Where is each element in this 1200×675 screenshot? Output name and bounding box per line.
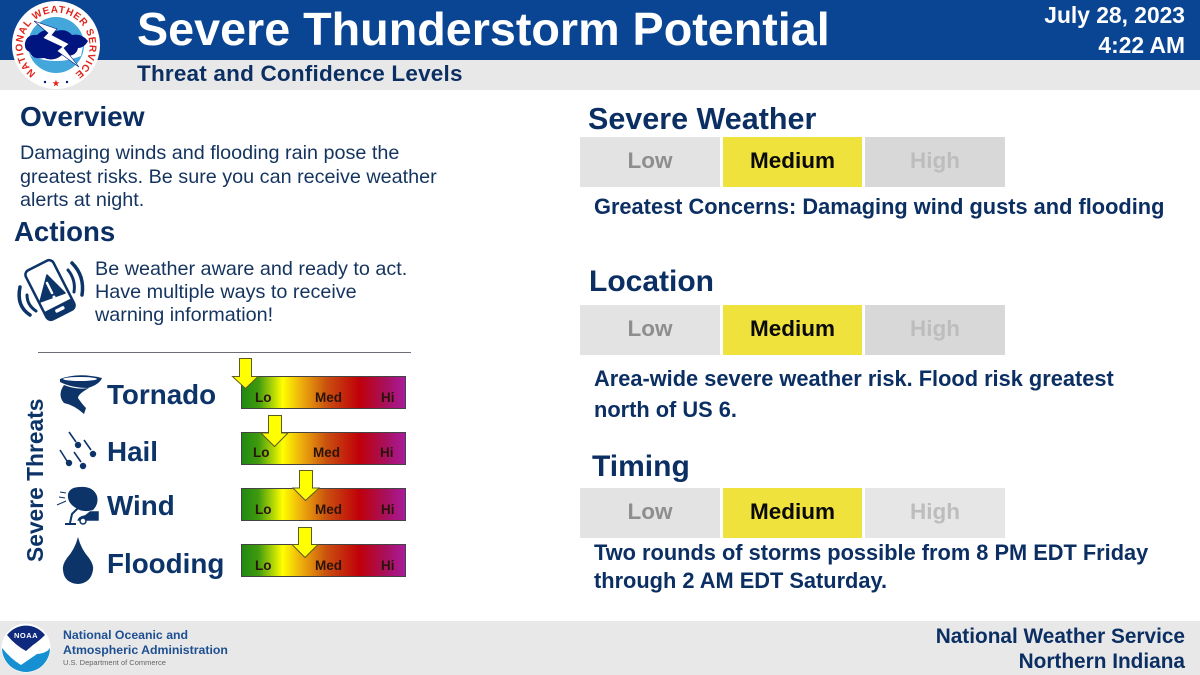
location scale [580, 305, 1005, 355]
severe weather text: Greatest Concerns: Damaging wind gusts and flooding [594, 194, 1164, 219]
icon: phone alert [17, 258, 84, 322]
location scale: High [910, 316, 960, 341]
location scale: Low [628, 316, 672, 341]
timing text [594, 540, 1148, 593]
hail gauge: Hi [380, 445, 394, 460]
wind label: Wind [107, 490, 175, 521]
location scale: Medium [750, 316, 835, 341]
date and time [1044, 2, 1185, 58]
severe weather heading: Severe Weather [588, 102, 816, 136]
date and time: July 28, 2023 [1044, 2, 1185, 28]
arrow: flooding level [291, 527, 319, 558]
icon: NWS logo: NATIONAL WEATHER SERVICE [16, 6, 97, 79]
NOAA name: National Oceanic and [63, 628, 188, 642]
subtitle: Threat and Confidence Levels [137, 61, 463, 86]
flooding label: Flooding [107, 548, 224, 579]
flooding gauge: Hi [381, 558, 394, 573]
actions text: Have multiple ways to receive [95, 281, 357, 303]
office name: Northern Indiana [1019, 650, 1185, 673]
tornado label: Tornado [107, 379, 216, 410]
flooding gauge: Lo [255, 558, 272, 573]
overview text: greatest risks. Be sure you can receive weather [20, 166, 437, 188]
overview text: alerts at night. [20, 189, 144, 211]
icon: NOAA logo: NOAA [14, 631, 38, 640]
timing text: Two rounds of storms possible from 8 PM EDT Friday [594, 540, 1148, 565]
flooding gauge [241, 544, 406, 577]
subheader band [0, 60, 1200, 90]
wind gauge: Med [315, 502, 342, 517]
timing heading: Timing [592, 450, 690, 483]
tornado gauge: Hi [381, 390, 394, 405]
date and time: 4:22 AM [1098, 32, 1185, 58]
icon: NOAA logo [2, 624, 50, 672]
flooding gauge: Med [315, 558, 342, 573]
tornado gauge: Med [315, 390, 342, 405]
wind gauge: Hi [381, 502, 394, 517]
actions heading: Actions [14, 216, 115, 247]
severe weather scale [580, 137, 1005, 187]
timing scale [580, 488, 1005, 538]
timing scale: Medium [750, 499, 835, 524]
wind gauge [241, 488, 406, 521]
icon: NWS logo: ★ [52, 79, 60, 88]
timing scale: Low [628, 499, 672, 524]
severe weather scale: Medium [750, 148, 835, 173]
header band [0, 0, 1200, 60]
office name [936, 625, 1186, 673]
title: Severe Thunderstorm Potential [137, 3, 830, 55]
NOAA name: Atmospheric Administration [63, 642, 228, 656]
location heading: Location [589, 265, 714, 298]
icon: wind damage [56, 486, 99, 525]
location text: Area-wide severe weather risk. Flood risk greatest [594, 366, 1114, 391]
severe weather scale: Low [628, 148, 672, 173]
hail gauge: Med [313, 445, 340, 460]
arrow: tornado level [231, 358, 259, 389]
actions text [95, 258, 407, 326]
footer band [0, 621, 1200, 675]
tornado gauge: Lo [255, 390, 272, 405]
department line: U.S. Department of Commerce [63, 658, 166, 667]
icon: hail [59, 432, 96, 470]
hail gauge: Lo [253, 445, 270, 460]
location text [594, 366, 1114, 422]
arrow: hail level [260, 415, 289, 448]
overview text: Damaging winds and flooding rain pose the [20, 142, 399, 164]
location text: north of US 6. [594, 397, 737, 422]
icon: tornado [60, 375, 102, 414]
actions text: warning information! [95, 304, 273, 326]
severe weather scale: High [910, 148, 960, 173]
hail label: Hail [107, 436, 158, 467]
tornado gauge [241, 376, 406, 409]
severe threats vertical label: Severe Threats [22, 399, 48, 562]
office name: National Weather Service [936, 625, 1185, 648]
timing scale: High [910, 499, 960, 524]
actions text: Be weather aware and ready to act. [95, 258, 407, 280]
overview text [20, 142, 437, 211]
hail gauge [241, 432, 406, 465]
NOAA name [63, 628, 228, 656]
wind gauge: Lo [255, 502, 272, 517]
timing text: through 2 AM EDT Saturday. [594, 568, 887, 593]
icon: flood drop [62, 537, 94, 584]
arrow: wind level [292, 470, 320, 502]
overview heading: Overview [20, 101, 145, 132]
